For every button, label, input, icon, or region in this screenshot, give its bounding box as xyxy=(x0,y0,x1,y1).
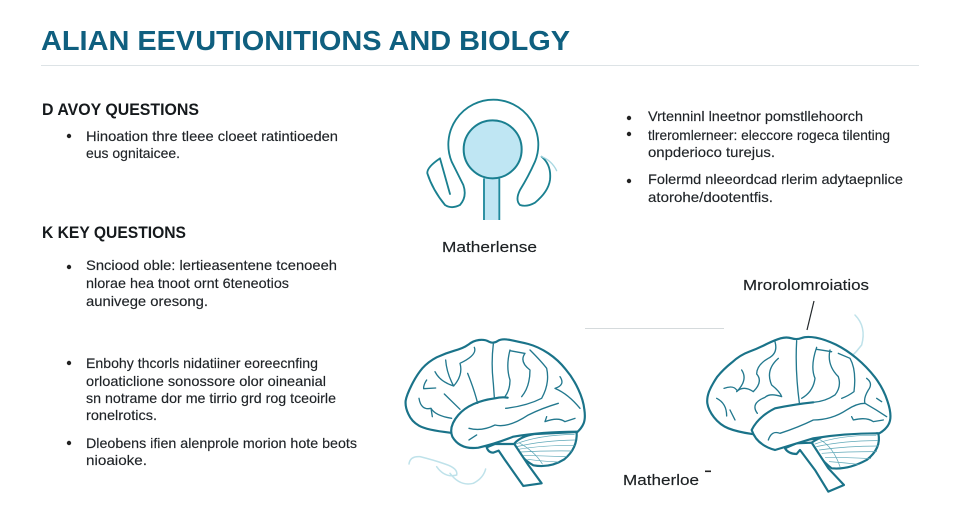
text block: note two: tlreromlerneer: eleccore rogeca tilenting xyxy=(648,127,890,143)
wisp xyxy=(409,457,486,484)
text block: note three: atorohe/dootentfis. xyxy=(648,189,773,205)
text block: first question bullet: eus ognitaicee. xyxy=(86,145,180,161)
text block: note one: Vrtenninl lneetnor pomstllehoorch xyxy=(648,108,863,124)
heading: avoy questions: D AVOY QUESTIONS xyxy=(42,101,199,119)
leader line xyxy=(807,301,814,330)
text block: note three xyxy=(627,171,903,205)
text block: note three: Folermd nleeordcad rlerim adytaepnlice xyxy=(648,171,903,187)
text block: key question two: orloaticlione sonossore olor oineanial xyxy=(86,373,326,389)
text block: note two xyxy=(627,127,890,160)
text block: key question one xyxy=(67,257,337,309)
text block: first question bullet: Hinoation thre tleee cloeet ratintioeden xyxy=(86,128,338,144)
label: matherloe: Matherloe xyxy=(623,472,699,489)
text block: key question two: sn notrame dor me tirrio grd rog tceoirle xyxy=(86,390,336,406)
text block: key question one: Snciood oble: lertieasentene tcenoeeh xyxy=(86,257,337,273)
label: microformations xyxy=(743,277,869,330)
label: matherloe xyxy=(623,470,711,489)
text block: key question two: Enbohy thcorls nidatiiner eoreecnfing xyxy=(86,355,318,371)
text block: key question one: nlorae hea tnoot ornt 6teneotios xyxy=(86,275,289,291)
heading: key questions: K KEY QUESTIONS xyxy=(42,224,186,242)
wisp xyxy=(851,315,863,357)
text block: key question three: nioaioke. xyxy=(86,452,147,468)
text block: key question three: Dleobens ifien alenprole morion hote beots xyxy=(86,435,357,451)
text block: key question two: ronelrotics. xyxy=(86,407,157,423)
panel: right notes xyxy=(627,108,903,205)
icon: right brain xyxy=(707,315,890,492)
label: microformations: Mrorolomroiatios xyxy=(743,277,869,294)
text block: key question two xyxy=(67,355,336,423)
icon: lens xyxy=(427,100,557,220)
label: matherlense: Matherlense xyxy=(442,239,537,256)
text block: key question three xyxy=(67,435,357,468)
title: ALIAN EEVUTIONITIONS AND BIOLGY xyxy=(41,25,570,56)
icon: left brain xyxy=(406,339,585,486)
panel: key questions xyxy=(42,224,357,468)
text block: first question bullet xyxy=(67,128,338,161)
text block: key question one: aunivege oresong. xyxy=(86,293,208,309)
text block: note two: onpderioco turejus. xyxy=(648,144,775,160)
connector line xyxy=(585,328,724,329)
panel: first questions xyxy=(42,101,338,161)
